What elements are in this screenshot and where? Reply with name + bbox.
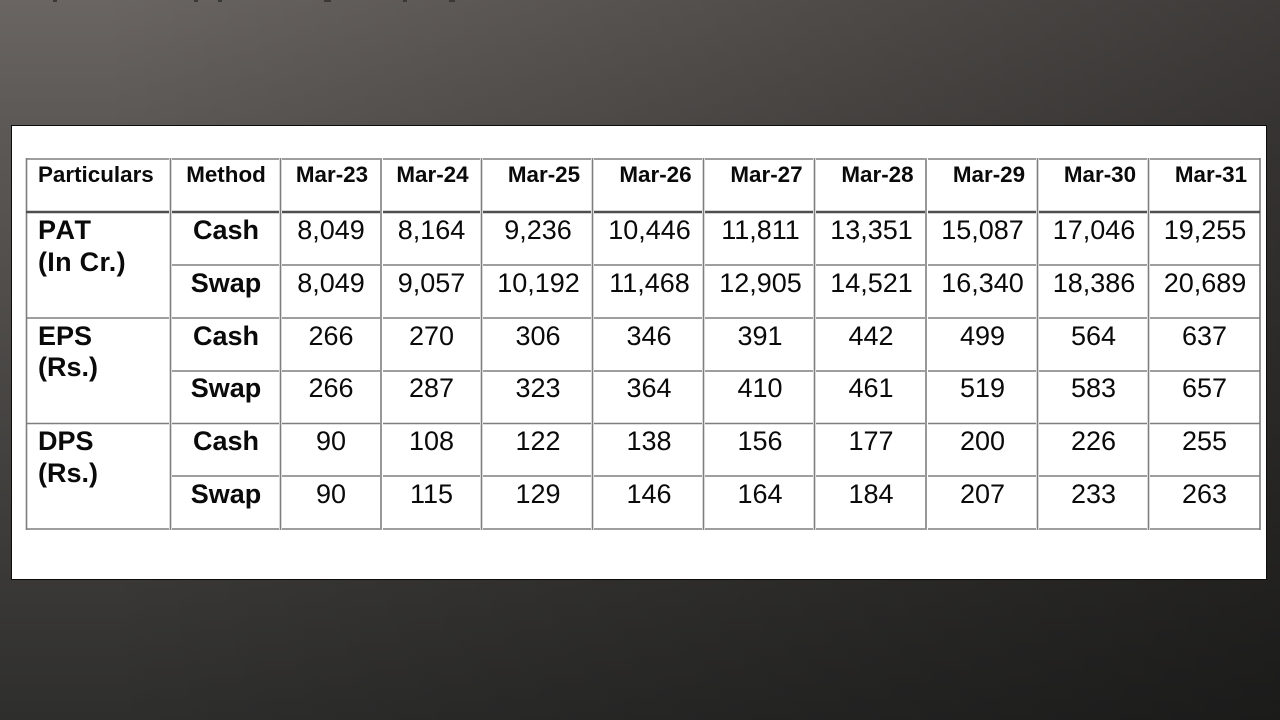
DPS swap row: 207 <box>960 479 1005 509</box>
PAT cash row: 17,046 <box>1053 215 1135 245</box>
PAT cash row: 8,164 <box>398 215 465 245</box>
PAT swap row: 18,386 <box>1053 268 1135 298</box>
PAT swap row: 12,905 <box>719 268 802 298</box>
PAT cash row: 13,351 <box>830 215 913 245</box>
DPS swap row: 184 <box>848 479 894 509</box>
DPS cash row <box>193 426 1227 456</box>
table header row: Mar-25 <box>508 162 580 187</box>
EPS cash row: 391 <box>737 321 783 351</box>
DPS swap row: 146 <box>626 479 672 509</box>
PAT label: PAT <box>38 215 92 245</box>
EPS swap row: 266 <box>308 373 354 403</box>
DPS label: DPS <box>38 426 94 456</box>
PAT swap row: 9,057 <box>398 268 465 298</box>
EPS cash row <box>193 321 1227 351</box>
clipped title remnants at top edge <box>53 0 455 2</box>
table header row: Particulars <box>38 162 154 187</box>
PAT cash row: 15,087 <box>941 215 1024 245</box>
DPS cash row: 156 <box>737 426 783 456</box>
DPS cash row: 226 <box>1071 426 1116 456</box>
PAT label: (In Cr.) <box>38 247 126 277</box>
DPS swap row: 115 <box>410 479 453 509</box>
EPS cash row: 266 <box>308 321 354 351</box>
EPS swap row: 583 <box>1071 373 1116 403</box>
EPS cash row: 270 <box>409 321 454 351</box>
EPS label: EPS <box>38 321 92 351</box>
DPS cash row: Cash <box>193 426 259 456</box>
white table panel <box>12 126 1266 580</box>
table header row: Mar-26 <box>619 162 692 187</box>
DPS cash row: 138 <box>626 426 672 456</box>
table header row: Mar-24 <box>396 162 469 187</box>
EPS swap row: 410 <box>737 373 783 403</box>
DPS swap row: 233 <box>1071 479 1116 509</box>
table header row: Mar-27 <box>730 162 803 187</box>
PAT cash row: 9,236 <box>504 215 572 245</box>
PAT cash row: 8,049 <box>297 215 365 245</box>
DPS cash row: 90 <box>316 426 346 456</box>
PAT group <box>38 215 1246 298</box>
EPS swap row: 364 <box>626 373 672 403</box>
DPS cash row: 177 <box>848 426 894 456</box>
PAT swap row: 14,521 <box>830 268 913 298</box>
DPS swap row: Swap <box>191 479 261 509</box>
PAT swap row: 20,689 <box>1164 268 1246 298</box>
DPS cash row: 122 <box>515 426 561 456</box>
EPS cash row: 346 <box>626 321 672 351</box>
PAT cash row: 11,811 <box>721 215 800 245</box>
EPS cash row: 442 <box>848 321 894 351</box>
DPS swap row: 164 <box>737 479 783 509</box>
EPS group <box>38 321 1227 403</box>
DPS swap row <box>191 479 1227 509</box>
PAT cash row: 19,255 <box>1164 215 1246 245</box>
EPS swap row: 519 <box>960 373 1005 403</box>
DPS cash row: 200 <box>960 426 1005 456</box>
EPS cash row: Cash <box>193 321 259 351</box>
PAT swap row: 8,049 <box>297 268 365 298</box>
EPS cash row: 564 <box>1071 321 1116 351</box>
EPS swap row <box>191 373 1227 403</box>
EPS cash row: 499 <box>960 321 1005 351</box>
DPS cash row: 108 <box>409 426 454 456</box>
table header row: Mar-30 <box>1064 162 1136 187</box>
DPS swap row: 90 <box>316 479 346 509</box>
PAT swap row: 11,468 <box>609 268 690 298</box>
PAT swap row: 16,340 <box>941 268 1024 298</box>
DPS group <box>38 426 1227 509</box>
table header row <box>38 162 1247 187</box>
EPS swap row: 287 <box>409 373 454 403</box>
EPS swap row: 461 <box>848 373 894 403</box>
table grid <box>26 158 1260 530</box>
EPS swap row: Swap <box>191 373 261 403</box>
DPS swap row: 129 <box>515 479 561 509</box>
PAT cash row <box>193 215 1246 245</box>
table header row: Mar-29 <box>953 162 1025 187</box>
PAT swap row: 10,192 <box>497 268 580 298</box>
table header row: Mar-28 <box>841 162 914 187</box>
EPS cash row: 306 <box>515 321 561 351</box>
EPS swap row: 323 <box>515 373 561 403</box>
table header row: Mar-23 <box>296 162 368 187</box>
PAT swap row: Swap <box>191 268 261 298</box>
DPS cash row: 255 <box>1182 426 1227 456</box>
EPS label: (Rs.) <box>38 352 98 382</box>
table header row: Mar-31 <box>1175 162 1247 187</box>
table header row: Method <box>186 162 266 187</box>
DPS label: (Rs.) <box>38 458 98 488</box>
PAT cash row: 10,446 <box>608 215 691 245</box>
PAT swap row <box>191 268 1246 298</box>
EPS swap row: 657 <box>1182 373 1227 403</box>
DPS swap row: 263 <box>1182 479 1227 509</box>
PAT cash row: Cash <box>193 215 259 245</box>
EPS cash row: 637 <box>1182 321 1227 351</box>
